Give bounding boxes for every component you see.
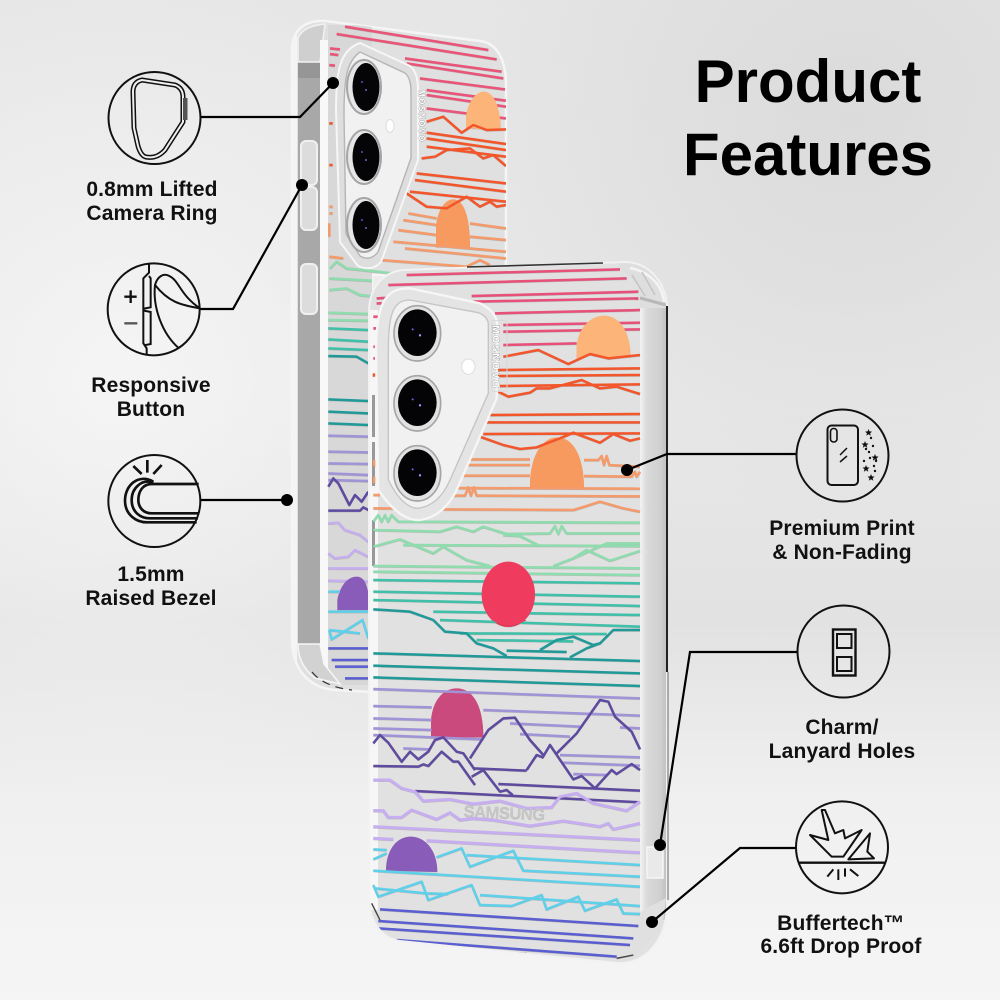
label: premium print bbox=[769, 517, 915, 564]
leader line: responsive button bbox=[200, 179, 308, 309]
label: responsive button: Responsive bbox=[91, 374, 211, 397]
front case side band bbox=[369, 262, 668, 960]
leader line: raised bezel bbox=[200, 494, 293, 506]
front phone case bbox=[369, 262, 668, 963]
label: lanyard holes: Charm/ bbox=[805, 716, 879, 739]
front case line-art pattern upper bbox=[373, 269, 640, 627]
leader line: lanyard holes bbox=[654, 652, 797, 851]
bottom edge details bbox=[372, 903, 633, 963]
back brand text: MOSNOVO bbox=[417, 90, 426, 143]
icon: drop proof bbox=[796, 801, 888, 893]
brand text on back: SAMSUNG bbox=[463, 802, 546, 824]
label: lanyard holes bbox=[769, 716, 915, 763]
icon: camera ring bbox=[108, 72, 200, 164]
leader line: drop proof bbox=[646, 848, 797, 928]
label: camera ring: Camera Ring bbox=[86, 202, 218, 225]
label: drop proof bbox=[760, 912, 922, 958]
front camera island bbox=[376, 288, 507, 520]
icon: lanyard holes bbox=[798, 606, 890, 698]
back lenses bbox=[347, 60, 381, 252]
label: responsive button bbox=[91, 374, 211, 421]
icon: responsive button bbox=[108, 263, 200, 355]
label: responsive button: Button bbox=[117, 398, 185, 421]
back case side band bbox=[292, 24, 372, 690]
label: premium print: & Non-Fading bbox=[772, 541, 912, 564]
title bbox=[683, 48, 933, 188]
front lenses bbox=[394, 306, 441, 501]
label: raised bezel: 1.5mm bbox=[117, 563, 185, 586]
label: camera ring bbox=[86, 178, 218, 225]
icon: premium print bbox=[796, 410, 888, 502]
leader line: camera ring bbox=[200, 77, 339, 117]
label: camera ring: 0.8mm Lifted bbox=[86, 178, 218, 201]
back case lower pattern bbox=[328, 313, 369, 678]
label: drop proof: Buffertech™ bbox=[777, 912, 905, 935]
title: Product bbox=[695, 48, 921, 115]
label: drop proof: 6.6ft Drop Proof bbox=[760, 935, 922, 958]
label: lanyard holes: Lanyard Holes bbox=[769, 740, 915, 763]
leader line: premium print bbox=[621, 454, 797, 476]
front brand text: MOSNOVO bbox=[489, 325, 500, 389]
front case line-art pattern lower bbox=[372, 620, 640, 963]
icon: raised bezel bbox=[108, 455, 200, 547]
label: raised bezel bbox=[85, 563, 217, 610]
back case line-art pattern bbox=[329, 27, 506, 297]
back camera island bbox=[336, 43, 426, 268]
label: premium print: Premium Print bbox=[769, 517, 915, 540]
back phone case bbox=[292, 21, 506, 692]
label: raised bezel: Raised Bezel bbox=[85, 587, 217, 610]
title: Features bbox=[683, 121, 933, 188]
